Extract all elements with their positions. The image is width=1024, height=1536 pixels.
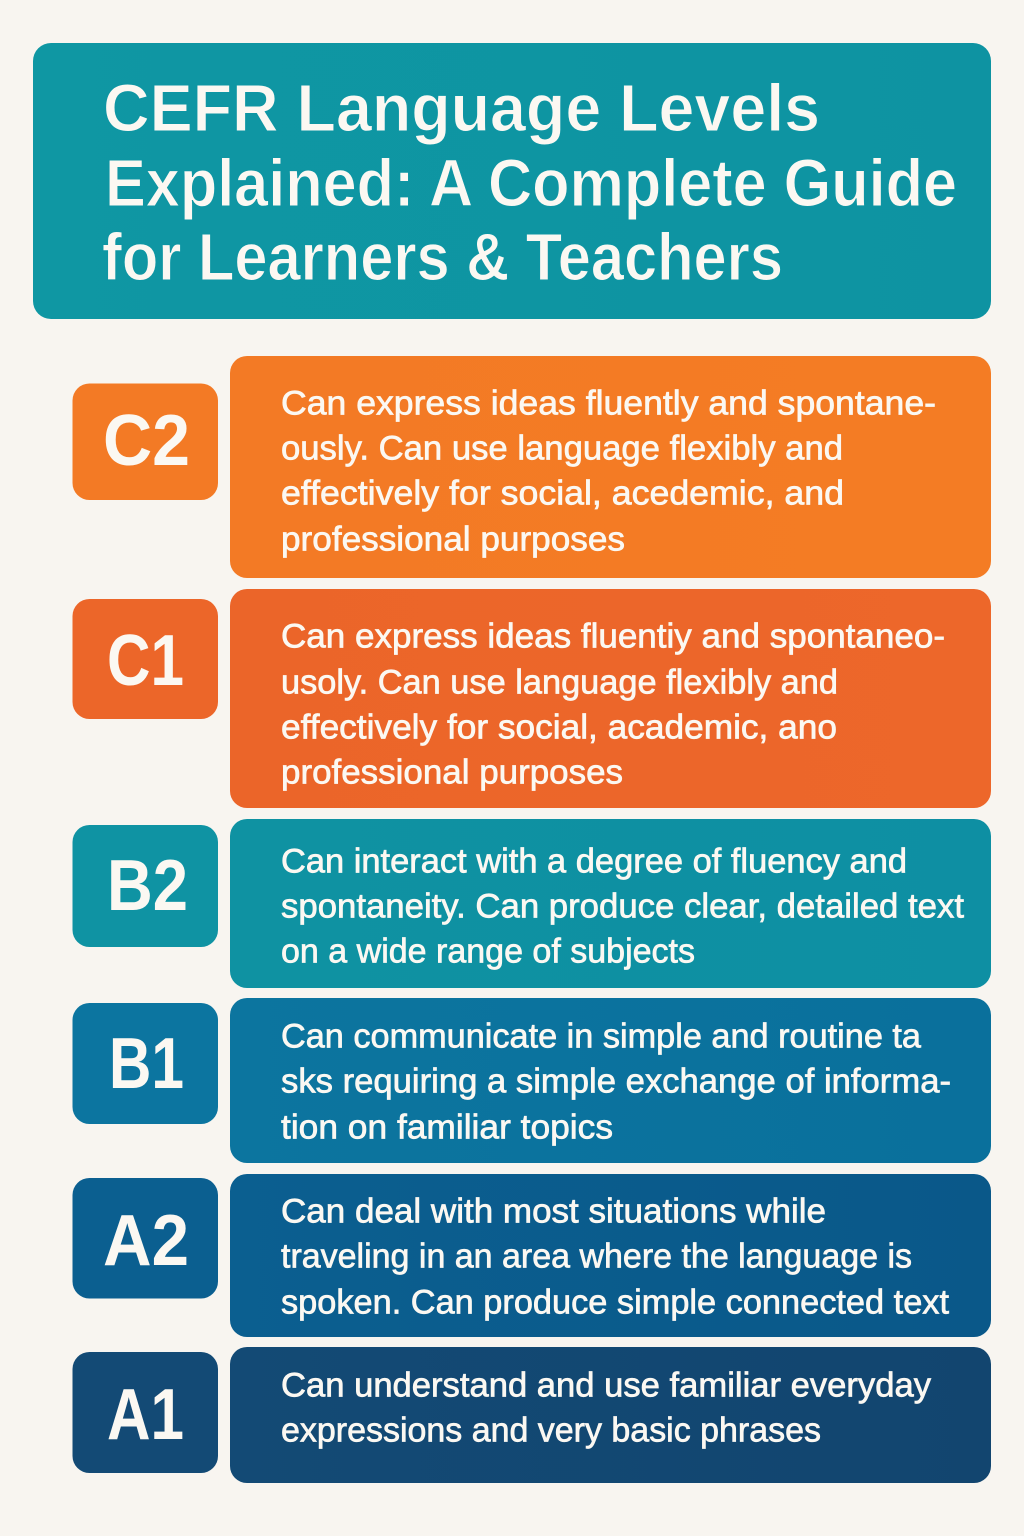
panel: C1 description: usoly. Can use language flexibly and <box>281 664 838 702</box>
badge: A1 <box>72 1352 218 1473</box>
panel: B2 description: Can interact with a degree of fluency and <box>281 842 907 880</box>
level row: A1 <box>72 1347 991 1483</box>
panel: C2 description: effectively for social, acedemic, and <box>281 474 844 512</box>
badge: B1: B1 <box>109 1024 184 1104</box>
badge: A2 <box>72 1178 218 1298</box>
panel: C1 description: professional purposes <box>281 754 623 792</box>
badge: B1 <box>72 1003 218 1124</box>
header panel <box>33 43 991 319</box>
level row: C2 <box>72 356 991 578</box>
panel: B1 description <box>230 998 991 1163</box>
panel: A2 description <box>230 1174 991 1337</box>
level row: B1 <box>72 998 991 1163</box>
panel: C1 description <box>230 589 991 808</box>
badge: B2 <box>72 825 218 947</box>
badge: C1: C1 <box>107 621 184 701</box>
title: CEFR Language Levels <box>103 71 820 146</box>
panel: A1 description <box>230 1347 991 1483</box>
title: for Learners & Teachers <box>102 220 783 295</box>
panel: C1 description: effectively for social, academic, ano <box>281 708 837 746</box>
badge: C2: C2 <box>103 401 190 481</box>
panel: C2 description: ously. Can use language flexibly and <box>281 430 843 468</box>
panel: A1 description: expressions and very basic phrases <box>281 1412 821 1450</box>
panel: B1 description: sks requiring a simple exchange of informa- <box>281 1062 951 1100</box>
panel: B1 description: tion on familiar topics <box>281 1108 613 1146</box>
badge: B2: B2 <box>107 846 188 926</box>
panel: C2 description: Can express ideas fluently and spontane- <box>281 384 936 422</box>
panel: C2 description: professional purposes <box>281 520 625 558</box>
panel: B2 description: spontaneity. Can produce clear, detailed text <box>281 888 965 926</box>
level row: B2 <box>72 819 991 988</box>
panel: A2 description: Can deal with most situations while <box>281 1192 826 1230</box>
level row: A2 <box>72 1174 991 1337</box>
badge: A1: A1 <box>107 1375 184 1455</box>
panel: A2 description: spoken. Can produce simple connected text <box>281 1284 950 1322</box>
level row: C1 <box>72 589 991 808</box>
panel: A1 description: Can understand and use familiar everyday <box>281 1366 931 1404</box>
title <box>102 71 957 295</box>
badge: C1 <box>72 599 218 719</box>
panel: C1 description: Can express ideas fluentiy and spontaneo- <box>281 618 945 656</box>
panel: A2 description: traveling in an area where the language is <box>281 1238 912 1276</box>
panel: B2 description: on a wide range of subjects <box>281 932 695 970</box>
badge: A2: A2 <box>103 1201 189 1281</box>
panel: C2 description <box>230 356 991 578</box>
title: Explained: A Complete Guide <box>105 146 957 221</box>
badge: C2 <box>72 384 218 500</box>
panel: B2 description <box>230 819 991 988</box>
panel: B1 description: Can communicate in simple and routine ta <box>281 1018 921 1056</box>
